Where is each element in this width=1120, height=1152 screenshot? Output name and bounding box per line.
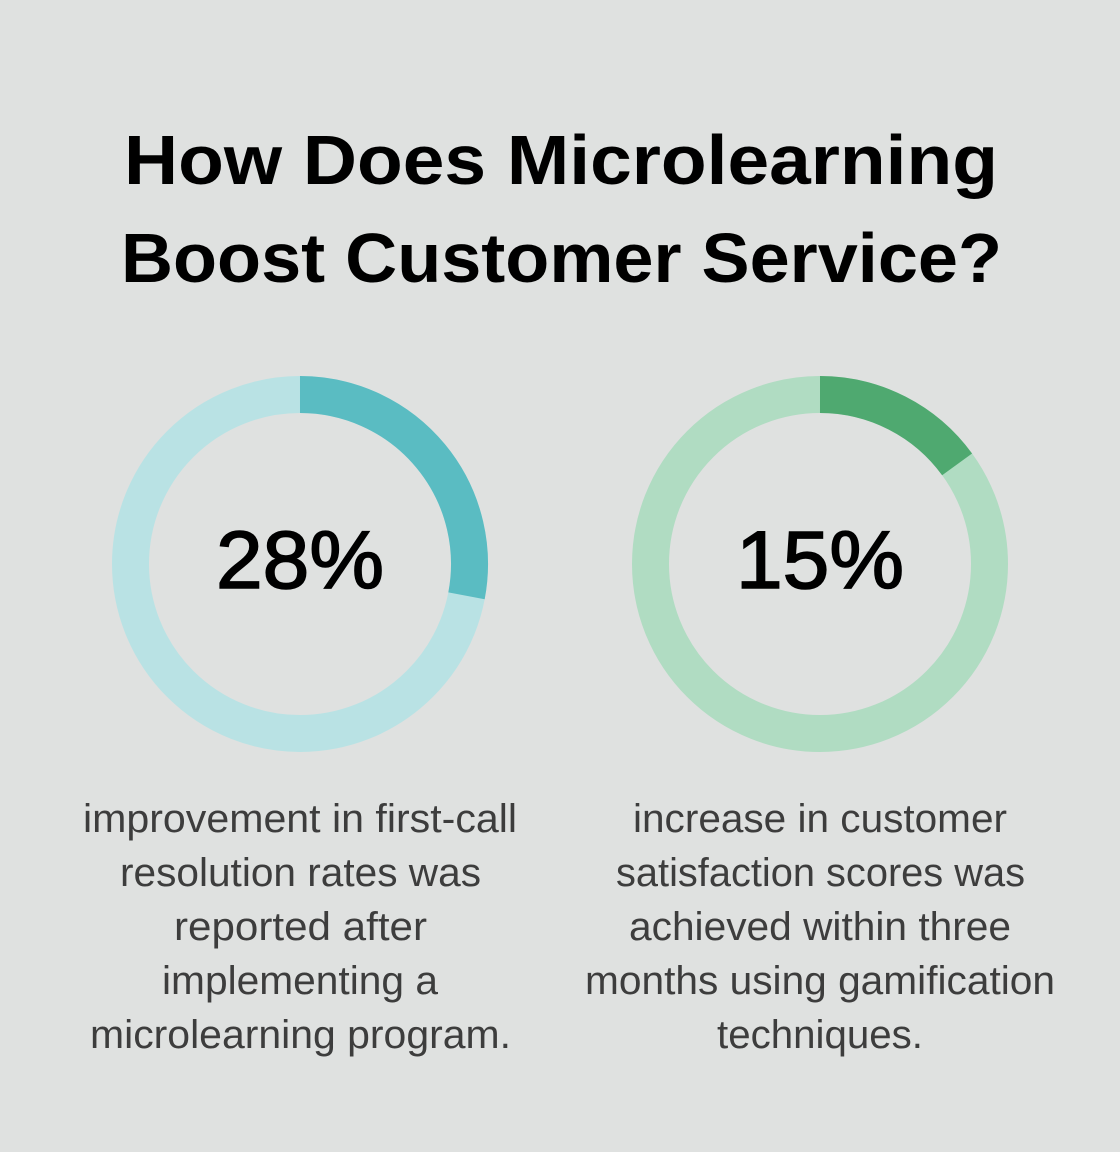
donut chart: 28% [130,394,470,734]
description: customer satisfaction: achieved within three [629,905,1011,949]
description: customer satisfaction: months using gamification [585,959,1055,1003]
title: Boost Customer Service? [121,219,1002,297]
title: How Does Microlearning [124,121,998,199]
panel: 15% stat [585,394,1055,1057]
value: 15%: 15% [736,515,904,606]
panel: 28% stat [83,394,517,1057]
description: customer satisfaction: techniques. [717,1013,923,1057]
donut chart: 15% [650,394,990,734]
description: first-call resolution [83,797,517,1057]
description: customer satisfaction: increase in customer [633,797,1007,841]
description: first-call resolution: implementing a [162,959,439,1003]
description: first-call resolution: microlearning program. [90,1013,511,1057]
title [121,121,1002,297]
description: first-call resolution: resolution rates was [120,851,481,895]
description: first-call resolution: reported after [174,905,427,949]
description: customer satisfaction [585,797,1055,1057]
description: first-call resolution: improvement in first-call [83,797,517,841]
description: customer satisfaction: satisfaction scores was [616,851,1025,895]
value: 28%: 28% [216,515,384,606]
